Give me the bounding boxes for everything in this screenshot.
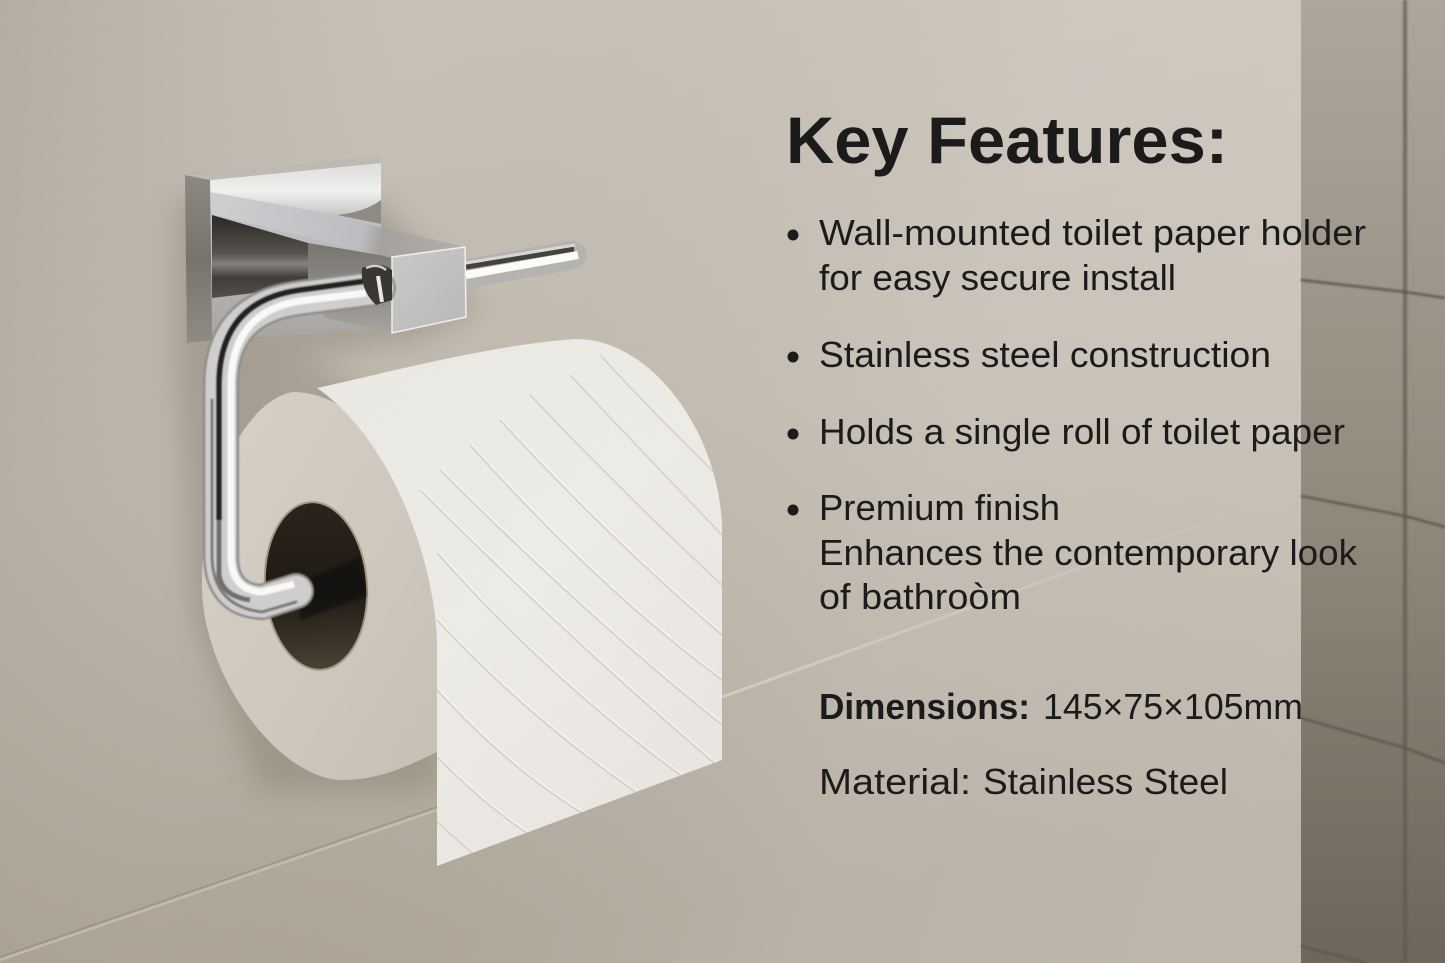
feature: premium finish: Premium finish: [819, 487, 1060, 528]
toilet paper roll: [202, 330, 730, 870]
feature: wall-mounted: Wall-mounted toilet paper holder: [819, 212, 1366, 253]
bent tube: [212, 281, 378, 612]
chrome holder: [185, 156, 578, 612]
feature: premium finish: of bathroòm: [819, 576, 1021, 617]
support rod: [466, 245, 578, 275]
arm side face: [308, 243, 392, 333]
feature: wall-mounted: [788, 212, 1366, 298]
hanging paper sheet: [300, 330, 730, 870]
material spec: [819, 761, 1228, 802]
feature: wall-mounted: for easy secure install: [819, 257, 1176, 298]
dimensions spec: [819, 686, 1303, 727]
cardboard core hole: [259, 499, 373, 673]
feature: stainless steel: Stainless steel construction: [819, 334, 1271, 375]
dimensions spec: 145×75×105mm: [1043, 686, 1303, 727]
material spec: Stainless Steel: [983, 761, 1228, 802]
tube collar: [362, 264, 392, 305]
soft shadows on wall: [175, 200, 480, 790]
wall plate: [185, 156, 381, 343]
dimensions spec: Dimensions:: [819, 686, 1030, 727]
roll end disk: [202, 392, 437, 780]
arm top face: [210, 192, 465, 258]
title: Key Features:: [786, 103, 1228, 177]
feature: premium finish: Enhances the contemporary look: [819, 532, 1358, 573]
material spec: Material:: [819, 761, 971, 802]
feature: premium finish: [788, 487, 1358, 617]
arm end block: [392, 247, 466, 333]
text panel: key features: [786, 103, 1366, 802]
feature: single roll: Holds a single roll of toilet paper: [819, 411, 1345, 452]
tiled side wall: [1301, 0, 1445, 963]
